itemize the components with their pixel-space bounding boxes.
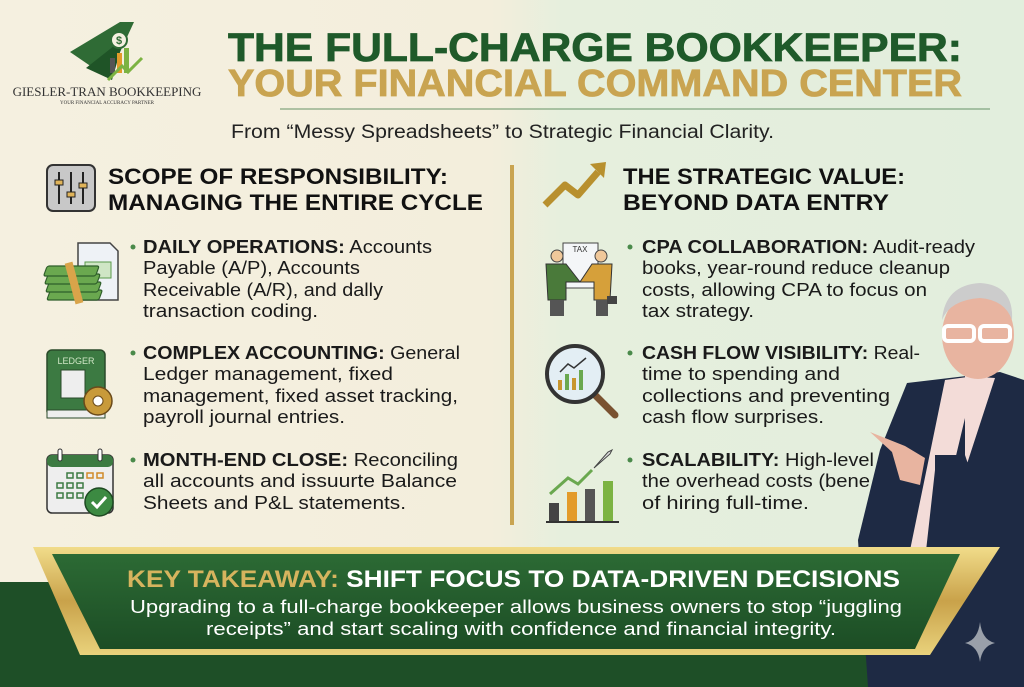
icon: ledger: LEDGER bbox=[57, 356, 95, 366]
heading: strategic value: BEYOND DATA ENTRY bbox=[623, 190, 889, 215]
item: cpa collaboration: CPA COLLABORATION: Audit-ready bbox=[642, 237, 975, 257]
callout: key takeaway banner bbox=[33, 547, 1000, 655]
item: month-end close: Sheets and P&L statements. bbox=[143, 493, 406, 513]
panel: scope of responsibility bbox=[44, 164, 483, 516]
icon: ledger bbox=[47, 350, 112, 418]
item: cash flow visibility: cash flow surprises. bbox=[642, 407, 824, 427]
person: presenter bbox=[858, 283, 1024, 687]
item: scalability: SCALABILITY: High-level bbox=[642, 450, 874, 470]
logo: GIESLER-TRAN BOOKKEEPING bbox=[13, 84, 201, 99]
divider bbox=[510, 165, 514, 525]
heading: strategic value bbox=[623, 164, 905, 215]
item: complex accounting: management, fixed asset tracking, bbox=[143, 386, 458, 406]
title: THE FULL-CHARGE BOOKKEEPER: bbox=[228, 26, 962, 70]
item: cash flow visibility: time to spending and bbox=[642, 364, 840, 384]
item: scalability: the overhead costs (bene bbox=[642, 471, 870, 491]
icon: sliders bbox=[47, 165, 95, 211]
item: cpa collaboration: books, year-round reduce cleanup bbox=[642, 258, 950, 278]
item: complex accounting: Ledger management, fixed bbox=[143, 364, 393, 384]
item: cpa collaboration: tax strategy. bbox=[642, 301, 754, 321]
logo: YOUR FINANCIAL ACCURACY PARTNER bbox=[60, 101, 155, 106]
icon: growth chart with rocket bbox=[546, 450, 619, 522]
item: daily operations bbox=[130, 237, 432, 321]
panel: strategic value bbox=[545, 162, 975, 522]
item: cash flow visibility bbox=[628, 343, 920, 427]
item: daily operations: transaction coding. bbox=[143, 301, 318, 321]
item: month-end close bbox=[130, 450, 458, 513]
logo: $ bbox=[116, 35, 122, 47]
heading: scope: MANAGING THE ENTIRE CYCLE bbox=[108, 190, 483, 215]
item: daily operations: Receivable (A/R), and dally bbox=[143, 280, 383, 300]
icon: magnifier bbox=[547, 346, 615, 415]
item: month-end close: all accounts and issuurte Balance bbox=[143, 471, 457, 491]
icon: cpa handshake bbox=[546, 243, 617, 316]
item: scalability: of hiring full-time. bbox=[642, 493, 809, 513]
icon: calendar bbox=[47, 449, 113, 516]
item: scalability bbox=[628, 450, 874, 513]
item: daily operations: DAILY OPERATIONS: Accounts bbox=[143, 237, 432, 257]
item: complex accounting: COMPLEX ACCOUNTING: General bbox=[143, 343, 460, 363]
icon: cash and invoice bbox=[44, 243, 118, 304]
subtitle: From “Messy Spreadsheets” to Strategic Financial Clarity. bbox=[231, 122, 774, 143]
item: cash flow visibility: CASH FLOW VISIBILITY: Real- bbox=[642, 343, 920, 363]
title: YOUR FINANCIAL COMMAND CENTER bbox=[228, 63, 962, 105]
title bbox=[228, 26, 962, 105]
logo bbox=[13, 22, 201, 106]
bottom green band bbox=[0, 582, 1024, 687]
item: cpa collaboration bbox=[628, 237, 975, 321]
item: month-end close: MONTH-END CLOSE: Reconciling bbox=[143, 450, 458, 470]
icon: cpa handshake: TAX bbox=[573, 245, 588, 254]
callout: key takeaway banner: receipts” and start scaling with confidence and financial integrity. bbox=[206, 619, 836, 639]
callout: key takeaway banner: KEY TAKEAWAY: SHIFT FOCUS TO DATA-DRIVEN DECISIONS bbox=[127, 566, 900, 593]
item: complex accounting bbox=[130, 343, 460, 427]
callout: key takeaway banner: Upgrading to a full-charge bookkeeper allows business owners to stop “juggling bbox=[130, 597, 902, 617]
icon: gold trend arrow bbox=[545, 162, 606, 205]
heading: scope: SCOPE OF RESPONSIBILITY: bbox=[108, 164, 448, 189]
item: cpa collaboration: costs, allowing CPA to focus on bbox=[642, 280, 927, 300]
item: complex accounting: payroll journal entries. bbox=[143, 407, 345, 427]
item: cash flow visibility: collections and preventing bbox=[642, 386, 890, 406]
item: daily operations: Payable (A/P), Accounts bbox=[143, 258, 360, 278]
icon: sparkle bbox=[965, 622, 995, 662]
heading: strategic value: THE STRATEGIC VALUE: bbox=[623, 164, 905, 189]
heading: scope bbox=[108, 164, 483, 215]
